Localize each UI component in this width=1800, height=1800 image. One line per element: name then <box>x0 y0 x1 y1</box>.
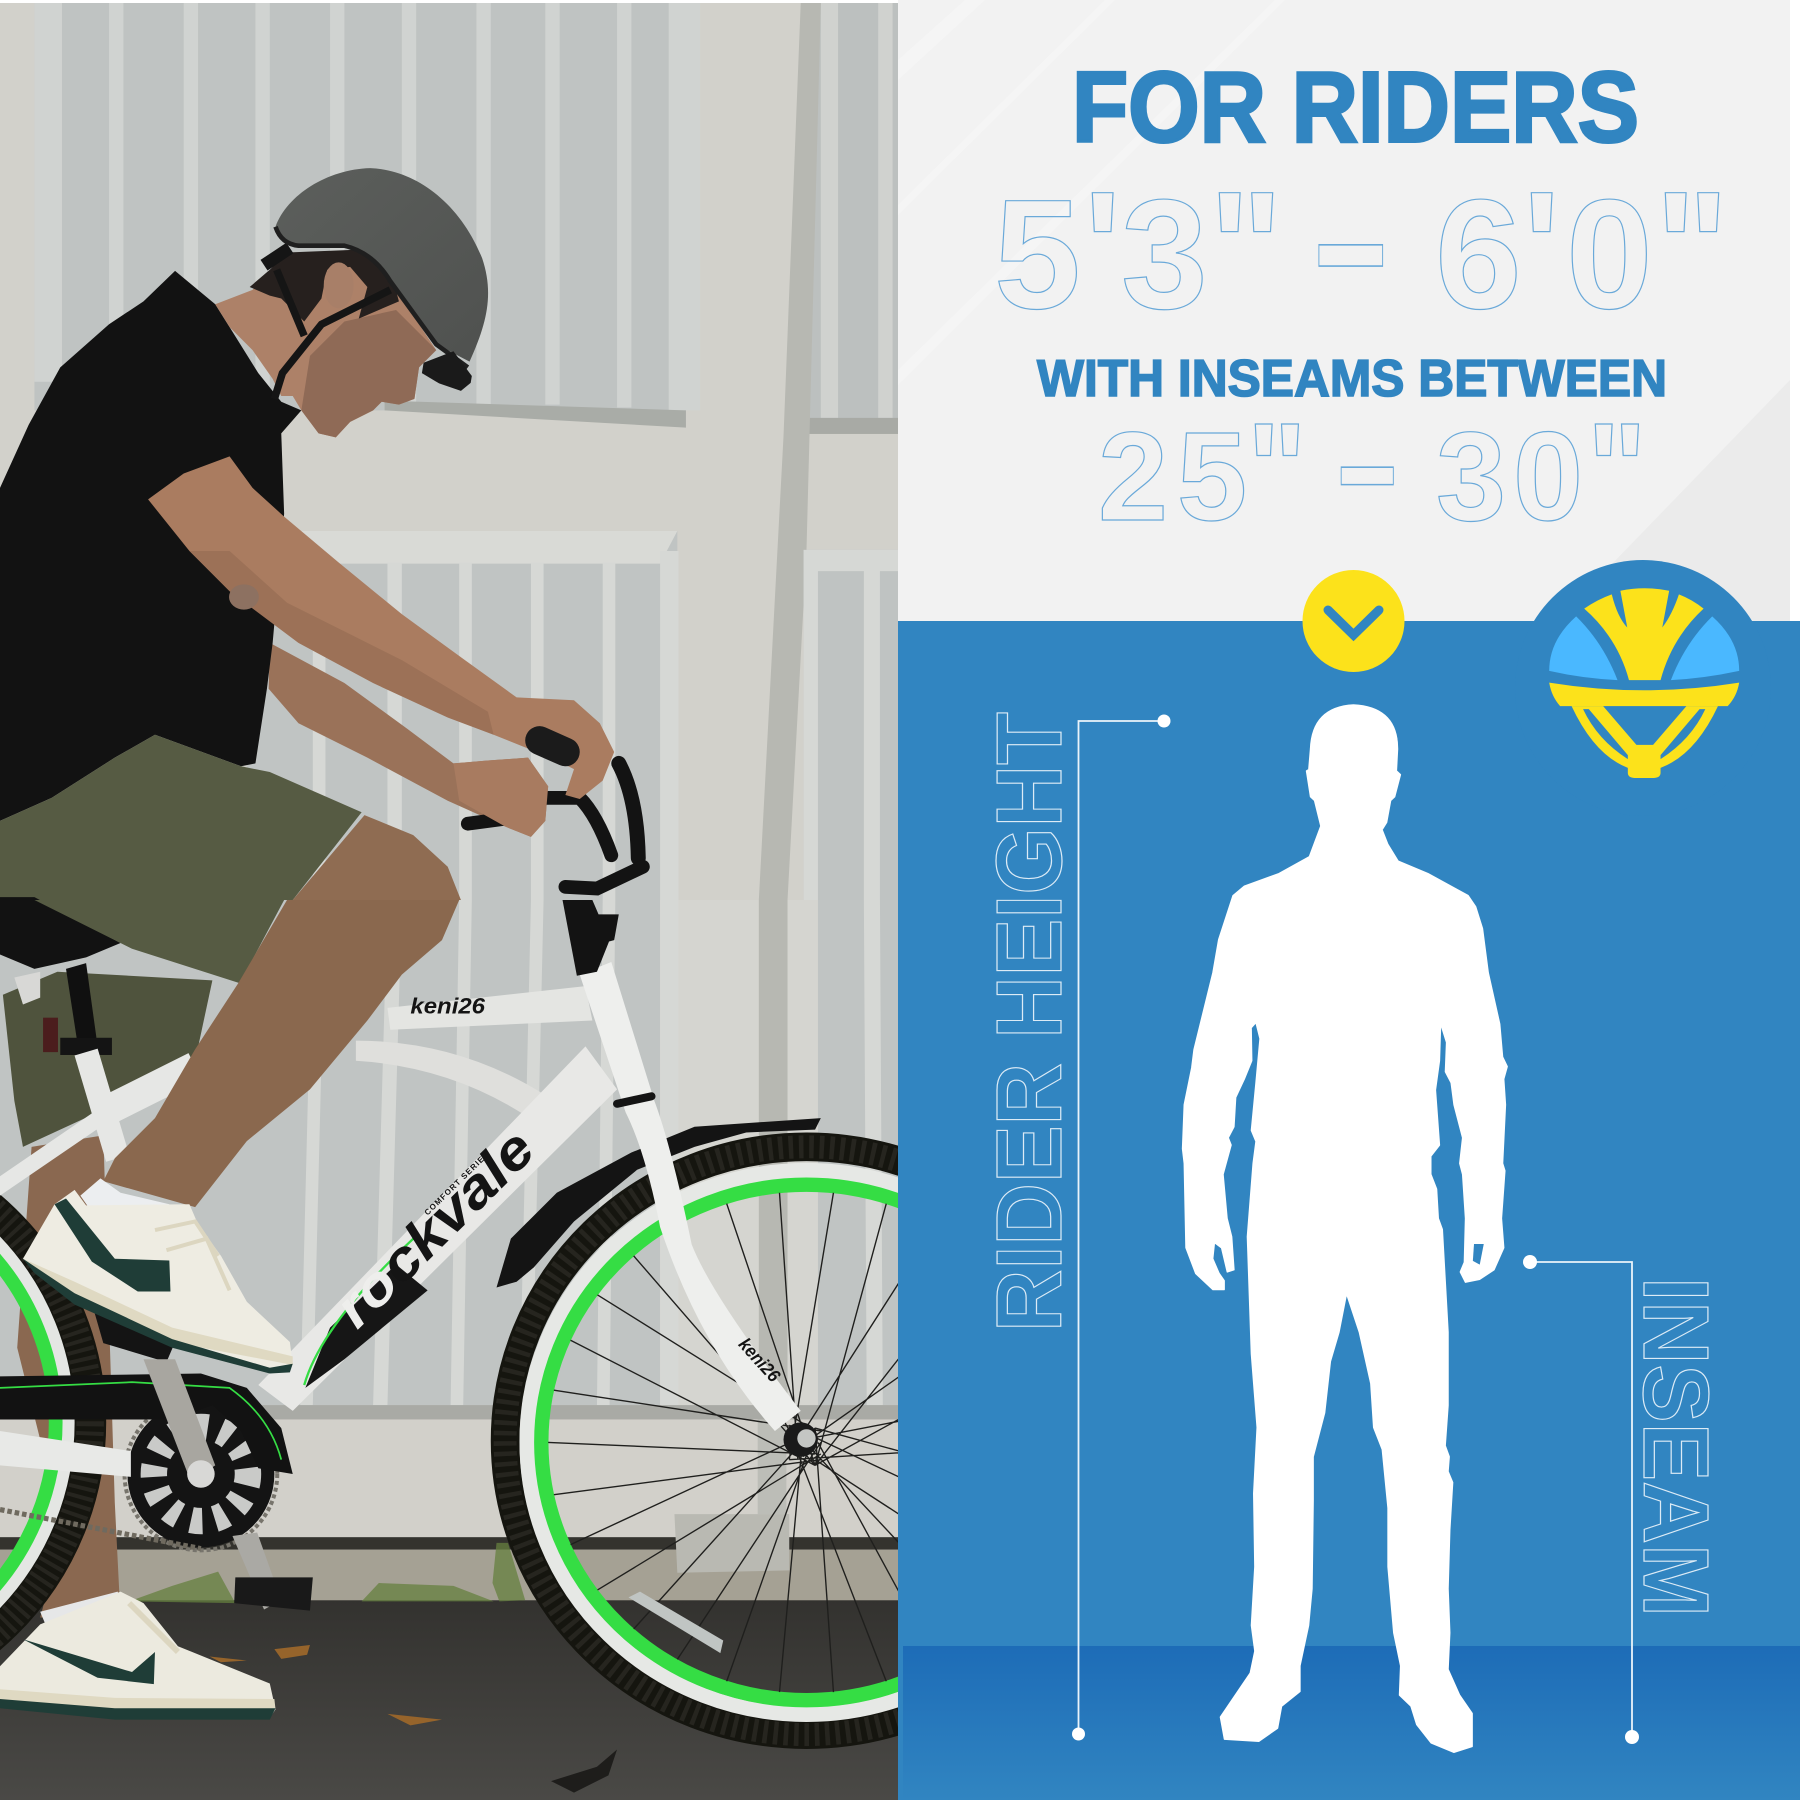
panel: blue measurement background <box>898 621 1800 1800</box>
wall bracket <box>674 1514 789 1573</box>
inseam range outlined: – <box>1338 364 1397 561</box>
top tube brand text: keni26 <box>410 994 486 1019</box>
floor band <box>903 1646 1800 1800</box>
near sock <box>80 1178 169 1221</box>
rider hair and ear <box>250 250 399 321</box>
rider neck and face <box>215 253 436 437</box>
rider height label: RIDER HEIGHT <box>977 712 1081 1332</box>
helmet straps <box>264 248 390 399</box>
icon: helmet badge <box>1515 560 1771 816</box>
fork brand text: keni26 <box>735 1333 785 1386</box>
front fork <box>580 962 801 1431</box>
pedal and crank <box>95 1313 313 1611</box>
seat and seat post <box>0 897 121 1055</box>
handlebar grip <box>540 740 565 752</box>
curved top tube <box>356 1041 545 1114</box>
photo upper half: wall and rider torso <box>0 0 900 900</box>
far leg <box>17 1135 121 1618</box>
far shoe <box>0 1592 276 1720</box>
inseam range outlined <box>1098 364 1647 561</box>
icon: standing person silhouette <box>1182 705 1507 1752</box>
rider t-shirt <box>0 271 301 821</box>
rockvale brand text: rockvale <box>322 1117 546 1339</box>
rider knee upper <box>293 815 461 900</box>
front fender <box>497 1118 821 1287</box>
rider shorts upper <box>0 735 362 900</box>
subtitle: WITH INSEAMS BETWEEN <box>1037 350 1667 408</box>
far shorts <box>3 972 212 1147</box>
chainring <box>125 1398 277 1550</box>
inseam range outlined: 30" <box>1436 397 1647 547</box>
lower frame tube <box>0 1431 131 1477</box>
leaves <box>210 1645 442 1725</box>
wall lower <box>0 900 900 1419</box>
near leg <box>103 900 459 1207</box>
handlebar <box>468 763 643 889</box>
inseam scale line <box>1523 1255 1639 1744</box>
chain <box>0 1510 201 1549</box>
rider near arm and hand <box>148 456 614 799</box>
ground <box>0 1537 900 1550</box>
far sock <box>40 1592 126 1639</box>
height range outlined <box>994 120 1729 359</box>
rider far arm <box>269 643 548 837</box>
rider height scale line <box>1072 714 1170 1740</box>
panel: light heading background <box>898 0 1790 625</box>
height range outlined: 6'0" <box>1435 160 1729 342</box>
handlebar stem <box>563 900 619 976</box>
panel: photo of rider on bicycle <box>0 3 898 1800</box>
down tube <box>258 1046 617 1411</box>
front hub <box>784 1422 818 1457</box>
bike rear frame <box>0 1052 195 1190</box>
chain guard <box>0 1374 293 1474</box>
helmet brim <box>422 351 472 391</box>
front wheel <box>490 1132 898 1749</box>
rider helmet <box>276 168 488 362</box>
inseam range outlined: 25" <box>1098 397 1307 547</box>
rider shorts lower <box>34 900 284 983</box>
photo lower half: bicycle and ground <box>0 897 898 1800</box>
comfort series text: COMFORT SERIES <box>423 1150 491 1217</box>
top tube <box>387 986 592 1030</box>
rear wheel <box>0 1137 90 1708</box>
height range outlined: – <box>1315 120 1387 359</box>
height range outlined: 5'3" <box>994 160 1283 342</box>
inseam label: INSEAM <box>1624 1277 1728 1617</box>
reflector <box>629 1592 723 1653</box>
title: FOR RIDERS <box>1072 52 1639 164</box>
grass <box>129 1543 525 1603</box>
near shoe <box>23 1190 293 1374</box>
icon: chevron down badge <box>1302 570 1404 672</box>
